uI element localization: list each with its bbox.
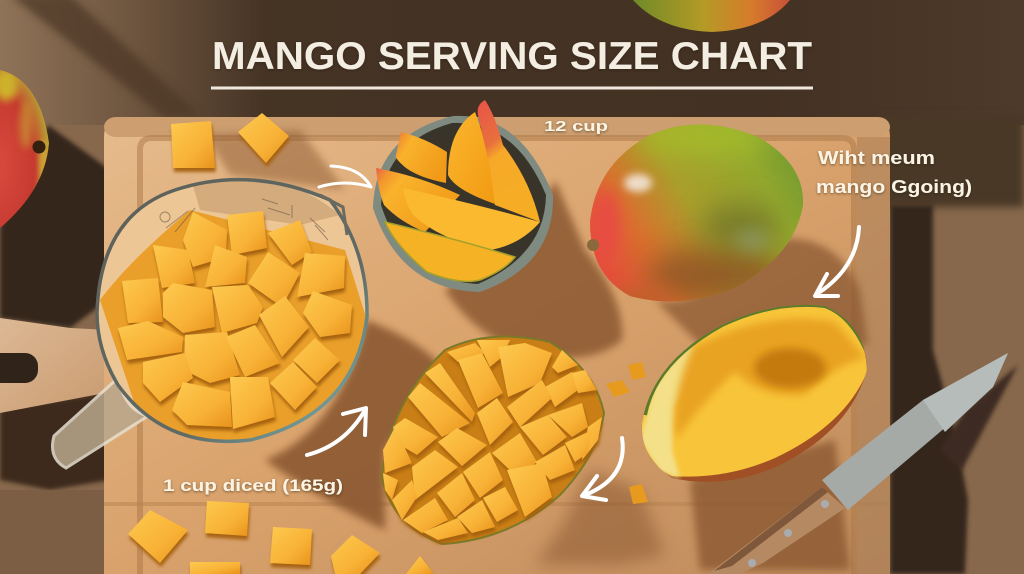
title underline <box>211 86 813 90</box>
mango at top edge <box>633 0 790 32</box>
hedgehog cut mango <box>382 337 604 544</box>
glass body <box>97 180 367 441</box>
label: 12 cup: 12 cup <box>544 118 608 135</box>
glass rim <box>97 180 367 441</box>
whole mango <box>587 124 804 302</box>
slice <box>403 188 540 250</box>
label: whole mango: mango Ggoing) <box>816 177 972 197</box>
slice <box>448 112 495 204</box>
slice <box>376 168 460 232</box>
bowl of mango slices <box>373 100 553 292</box>
cutting board <box>104 117 890 574</box>
whole mango at left edge <box>0 69 50 230</box>
measuring marks <box>160 199 328 240</box>
loose mango cubes at bottom of board <box>128 501 434 574</box>
label: 1 cup diced: 1 cup diced (165g) <box>163 476 343 495</box>
arrow: to measuring cup <box>307 408 366 455</box>
arrow: to halved mango <box>815 227 859 296</box>
slice <box>396 132 447 183</box>
title: MANGO SERVING SIZE CHART <box>212 35 812 78</box>
slice <box>478 100 540 222</box>
glass handle <box>52 378 148 468</box>
arrow: to diced mango <box>582 438 623 500</box>
label: whole mango: Wiht meum <box>818 148 935 168</box>
cutting board handle <box>0 318 110 413</box>
measuring cup with diced mango <box>52 173 370 468</box>
label: whole mango <box>816 148 972 197</box>
arrow: to bowl <box>319 166 371 187</box>
small mango pieces on board <box>606 362 648 504</box>
knife <box>708 353 1008 574</box>
loose mango cubes on top of board <box>171 113 289 168</box>
halved mango <box>640 305 867 482</box>
shadows on board <box>205 130 868 570</box>
slice <box>385 222 515 281</box>
diced mango cubes <box>118 211 352 429</box>
